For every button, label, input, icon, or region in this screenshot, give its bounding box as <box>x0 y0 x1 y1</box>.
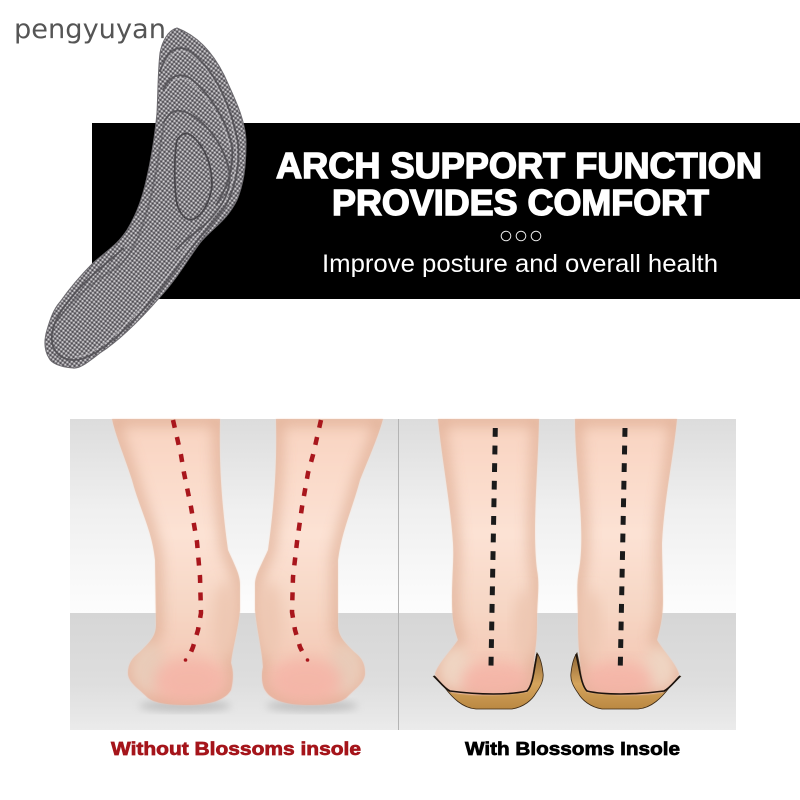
left insole <box>433 653 543 709</box>
black banner <box>92 123 800 299</box>
caption: with insole: With Blossoms Insole <box>465 739 680 759</box>
left foot <box>112 419 240 705</box>
subheading: Improve posture and overall health <box>322 250 718 278</box>
divider <box>398 419 399 730</box>
black alignment lines <box>491 428 625 666</box>
right foot <box>575 419 679 698</box>
right foot <box>255 419 383 705</box>
panel: with insole <box>399 419 736 730</box>
insole upper edges <box>434 654 537 694</box>
insole product image <box>45 28 246 368</box>
red alignment lines <box>173 420 321 662</box>
foot shadows <box>139 700 358 712</box>
heading: ARCH SUPPORT FUNCTION <box>276 145 762 186</box>
contour ridges dark <box>52 48 239 360</box>
heading <box>276 145 762 223</box>
heading: PROVIDES COMFORT <box>332 182 709 223</box>
watermark: pengyuyan <box>14 14 166 45</box>
caption: without insole: Without Blossoms insole <box>111 739 361 759</box>
right insole <box>571 653 681 709</box>
left foot <box>435 419 539 698</box>
panel: without insole <box>70 419 398 730</box>
arch oval pad <box>175 133 212 220</box>
contour ridges light <box>75 51 236 357</box>
three small circles <box>501 231 541 241</box>
